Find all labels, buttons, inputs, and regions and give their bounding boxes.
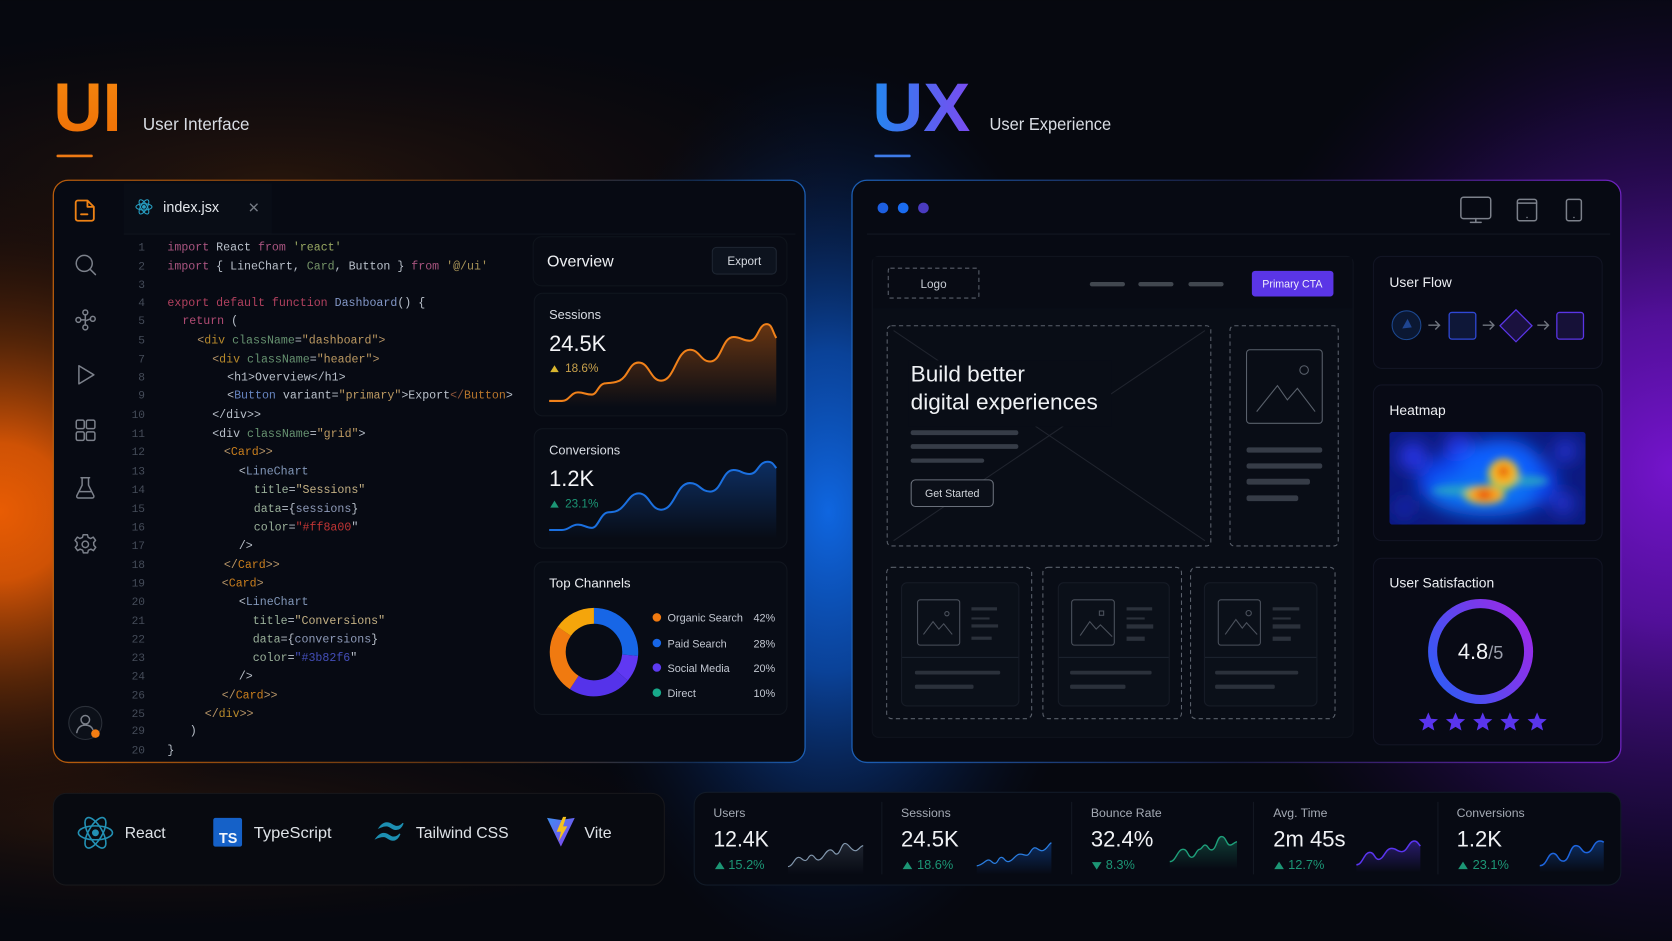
- get started button: [911, 480, 993, 507]
- code block: <h1>Overview</h1>: [227, 372, 346, 385]
- code block: </Card>>: [222, 689, 278, 702]
- line numbers: 7: [138, 355, 145, 367]
- sessions area chart: [549, 324, 776, 407]
- line numbers: 9: [138, 390, 145, 402]
- typescript: [213, 818, 332, 847]
- rating stars: [1419, 712, 1547, 730]
- code block: data={sessions}: [254, 503, 358, 516]
- line numbers: 5: [138, 316, 145, 328]
- line numbers: 23: [132, 653, 145, 665]
- flow arrow: [1428, 321, 1440, 330]
- window dots: [878, 203, 929, 213]
- sparkline: sessions: [977, 843, 1051, 874]
- metric: conversions: 1.2K: [1457, 827, 1502, 852]
- line numbers: 13: [132, 467, 145, 479]
- sparkline: users: [788, 843, 863, 874]
- hero headline: Build better: [911, 362, 1025, 387]
- rating value: 4.8/5: [1458, 639, 1503, 664]
- line numbers: 22: [132, 634, 145, 646]
- line numbers: 24: [132, 671, 145, 683]
- sparkline: conversions: [1540, 841, 1604, 872]
- card: user flow: [1373, 256, 1602, 368]
- vite: [547, 817, 612, 847]
- text lines: [1247, 447, 1322, 501]
- code block: }: [167, 744, 174, 757]
- line numbers: 21: [132, 616, 145, 628]
- nav links: [1090, 282, 1224, 286]
- UX title: UX: [872, 69, 970, 146]
- code block: export default function Dashboard() {: [167, 297, 425, 310]
- UI heading: [53, 69, 250, 157]
- code block: <LineChart: [239, 596, 309, 609]
- line numbers: 11: [132, 429, 145, 441]
- tab filename: index.jsx: [163, 200, 220, 216]
- line numbers: 25: [132, 709, 145, 721]
- line numbers: 18: [132, 560, 145, 572]
- overview header card: [533, 237, 787, 286]
- card: sessions: [534, 293, 787, 416]
- side wireframe: [1230, 326, 1338, 546]
- UI title: UI: [53, 69, 122, 146]
- sessions delta: 18.6%: [565, 362, 598, 375]
- line numbers: 8: [138, 373, 145, 385]
- conversions delta: 23.1%: [565, 498, 598, 511]
- metric: sessions: 24.5K: [901, 827, 959, 852]
- flow decision: [1500, 310, 1532, 342]
- code block: title="Sessions": [254, 484, 365, 497]
- conversions value: 1.2K: [549, 466, 595, 491]
- flow step: [1449, 312, 1476, 339]
- line numbers: 10: [132, 410, 145, 422]
- code block: <LineChart: [239, 466, 309, 479]
- line numbers: 26: [132, 690, 145, 702]
- logo box: [888, 268, 979, 298]
- metric: conversions: [1457, 806, 1604, 872]
- legend: 10%: [753, 688, 776, 700]
- code block: </div>>: [205, 708, 254, 721]
- logo box: Logo: [921, 278, 947, 291]
- UX underline: [874, 155, 911, 157]
- user flow title: User Flow: [1389, 274, 1453, 290]
- legend: Paid Search: [668, 638, 727, 650]
- code block: <div className="dashboard">: [197, 334, 385, 347]
- sessions delta: [550, 362, 598, 375]
- icon: user avatar: [69, 706, 102, 740]
- line numbers: 19: [132, 578, 145, 590]
- code block: [167, 242, 513, 757]
- icon: file: [76, 200, 94, 221]
- wireframe card 3: [1191, 567, 1335, 719]
- panel: tech stack: [53, 793, 664, 885]
- legend: 20%: [753, 663, 776, 675]
- hero headline: digital experiences: [911, 389, 1098, 414]
- legend: Direct: [668, 688, 696, 700]
- metric: bounce rate: 32.4%: [1091, 827, 1153, 852]
- code block: import { LineChart, Card, Button } from '@/ui': [167, 260, 488, 273]
- code block: return (: [182, 315, 238, 328]
- icon: blocks: [76, 420, 95, 440]
- code block: <Card>>: [224, 446, 273, 459]
- wireframe page: [872, 256, 1353, 737]
- sparkline: bounce rate: [1170, 837, 1237, 869]
- icon: tablet: [1517, 199, 1537, 221]
- metric: sessions: 18.6%: [917, 857, 953, 872]
- code block: <Button variant="primary">Export</Button>: [227, 389, 513, 402]
- top channels title: Top Channels: [549, 576, 631, 591]
- tab close: [250, 204, 258, 211]
- metric: conversions: 23.1%: [1473, 857, 1509, 872]
- wireframe card 1: [887, 567, 1032, 719]
- sparkline: average time: [1356, 841, 1420, 872]
- hero text lines: [911, 430, 1018, 463]
- metric: users: 12.4K: [713, 827, 769, 852]
- metric: bounce rate: [1091, 806, 1237, 872]
- metric: average time: 2m 45s: [1273, 827, 1346, 852]
- line numbers: 20: [132, 597, 145, 609]
- tailwind label: Tailwind CSS: [416, 825, 509, 842]
- UI underline: [57, 155, 93, 157]
- panel: UI code editor: [53, 180, 805, 762]
- code block: ): [190, 725, 197, 738]
- code block: <Card>: [222, 577, 264, 590]
- code block: import React from 'react': [167, 242, 342, 255]
- nav bar: [873, 257, 1352, 308]
- icon: git branches: [76, 310, 95, 330]
- line numbers: 15: [132, 504, 145, 516]
- icon: flask: [77, 478, 94, 498]
- conversions label: Conversions: [549, 442, 620, 457]
- sessions value: 24.5K: [549, 331, 607, 356]
- UI subtitle: User Interface: [143, 114, 250, 134]
- line numbers: 5: [138, 335, 145, 347]
- metric: users: [713, 806, 863, 874]
- heatmap title: Heatmap: [1389, 402, 1446, 418]
- typescript label: TypeScript: [254, 825, 332, 842]
- satisfaction title: User Satisfaction: [1389, 575, 1494, 591]
- UX subtitle: User Experience: [990, 114, 1111, 134]
- legend: 42%: [753, 613, 776, 625]
- get started button: Get Started: [925, 488, 980, 500]
- flow arrow: [1537, 321, 1549, 330]
- export button: [712, 247, 776, 274]
- line numbers: 2: [138, 261, 145, 273]
- conversions delta: [550, 498, 598, 511]
- line numbers: 14: [132, 485, 145, 497]
- panel: UX wireframe: [852, 180, 1621, 762]
- react label: React: [125, 825, 166, 842]
- metric: sessions: [901, 806, 1051, 874]
- code block: </div>>: [212, 409, 261, 422]
- donut chart: [558, 616, 630, 688]
- line numbers: [132, 243, 145, 757]
- code block: title="Conversions": [253, 615, 385, 628]
- legend: Social Media: [668, 663, 731, 675]
- tailwind: [376, 823, 509, 842]
- icon: react atom: [78, 815, 112, 851]
- panel: metrics: [694, 792, 1621, 885]
- sessions label: Sessions: [549, 307, 601, 322]
- code block: color="#3b82f6": [253, 652, 357, 665]
- react: [78, 815, 166, 851]
- icon: run: [79, 366, 94, 384]
- primary CTA button: Primary CTA: [1262, 278, 1323, 290]
- UX heading: [872, 69, 1111, 157]
- metric: users: 15.2%: [728, 857, 765, 872]
- code block: data={conversions}: [253, 633, 378, 646]
- heatmap graphic: [1389, 432, 1586, 525]
- flow arrow: [1483, 321, 1494, 330]
- icon: settings gear: [75, 535, 96, 553]
- icon: desktop: [1461, 197, 1491, 222]
- tab: index.jsx: [124, 183, 272, 234]
- metric: bounce rate: Bounce Rate: [1091, 806, 1162, 820]
- icon: vite: [547, 817, 575, 847]
- metric: users: Users: [713, 806, 745, 820]
- metric: average time: [1273, 806, 1420, 872]
- conversions area chart: [549, 462, 776, 539]
- line numbers: 29: [132, 726, 145, 738]
- code block: />: [239, 670, 253, 683]
- line numbers: 4: [138, 298, 145, 310]
- flow end: [1557, 312, 1583, 339]
- flow start node: [1392, 311, 1421, 340]
- wireframe card 2: [1043, 567, 1181, 719]
- export button: Export: [727, 255, 762, 268]
- legend: 28%: [753, 638, 776, 650]
- line numbers: 1: [138, 243, 145, 255]
- line numbers: 12: [132, 447, 145, 459]
- hero wireframe: [887, 326, 1211, 546]
- line numbers: 20: [132, 745, 145, 757]
- code block: <div className="grid">: [212, 428, 366, 441]
- legend: Organic Search: [668, 613, 743, 625]
- metric: conversions: Conversions: [1457, 806, 1525, 820]
- line numbers: 17: [132, 541, 145, 553]
- card: top channels: [534, 562, 787, 714]
- icon: tailwind waves: [376, 823, 403, 840]
- icon: phone: [1566, 199, 1581, 221]
- icon: react: [136, 198, 152, 215]
- code block: <div className="header">: [212, 354, 379, 367]
- rating ring: [1433, 604, 1529, 700]
- icon: search: [76, 255, 95, 275]
- line numbers: 3: [138, 280, 145, 292]
- primary CTA button: [1252, 271, 1333, 296]
- code block: </Card>>: [224, 559, 280, 572]
- card: user satisfaction: [1373, 558, 1602, 745]
- code block: color="#ff8a00": [254, 522, 358, 535]
- metric: average time: Avg. Time: [1273, 806, 1328, 820]
- card: heatmap: [1373, 385, 1602, 541]
- icon: TS badge: TS: [219, 831, 238, 847]
- overview title: Overview: [547, 254, 614, 271]
- card: conversions: [534, 429, 787, 548]
- code block: />: [239, 540, 253, 553]
- vite label: Vite: [584, 825, 612, 842]
- metric: bounce rate: 8.3%: [1106, 857, 1135, 872]
- line numbers: 16: [132, 523, 145, 535]
- image placeholder: [1247, 350, 1322, 423]
- metric: average time: 12.7%: [1288, 857, 1324, 872]
- legend: [653, 613, 776, 700]
- metric: sessions: Sessions: [901, 806, 951, 820]
